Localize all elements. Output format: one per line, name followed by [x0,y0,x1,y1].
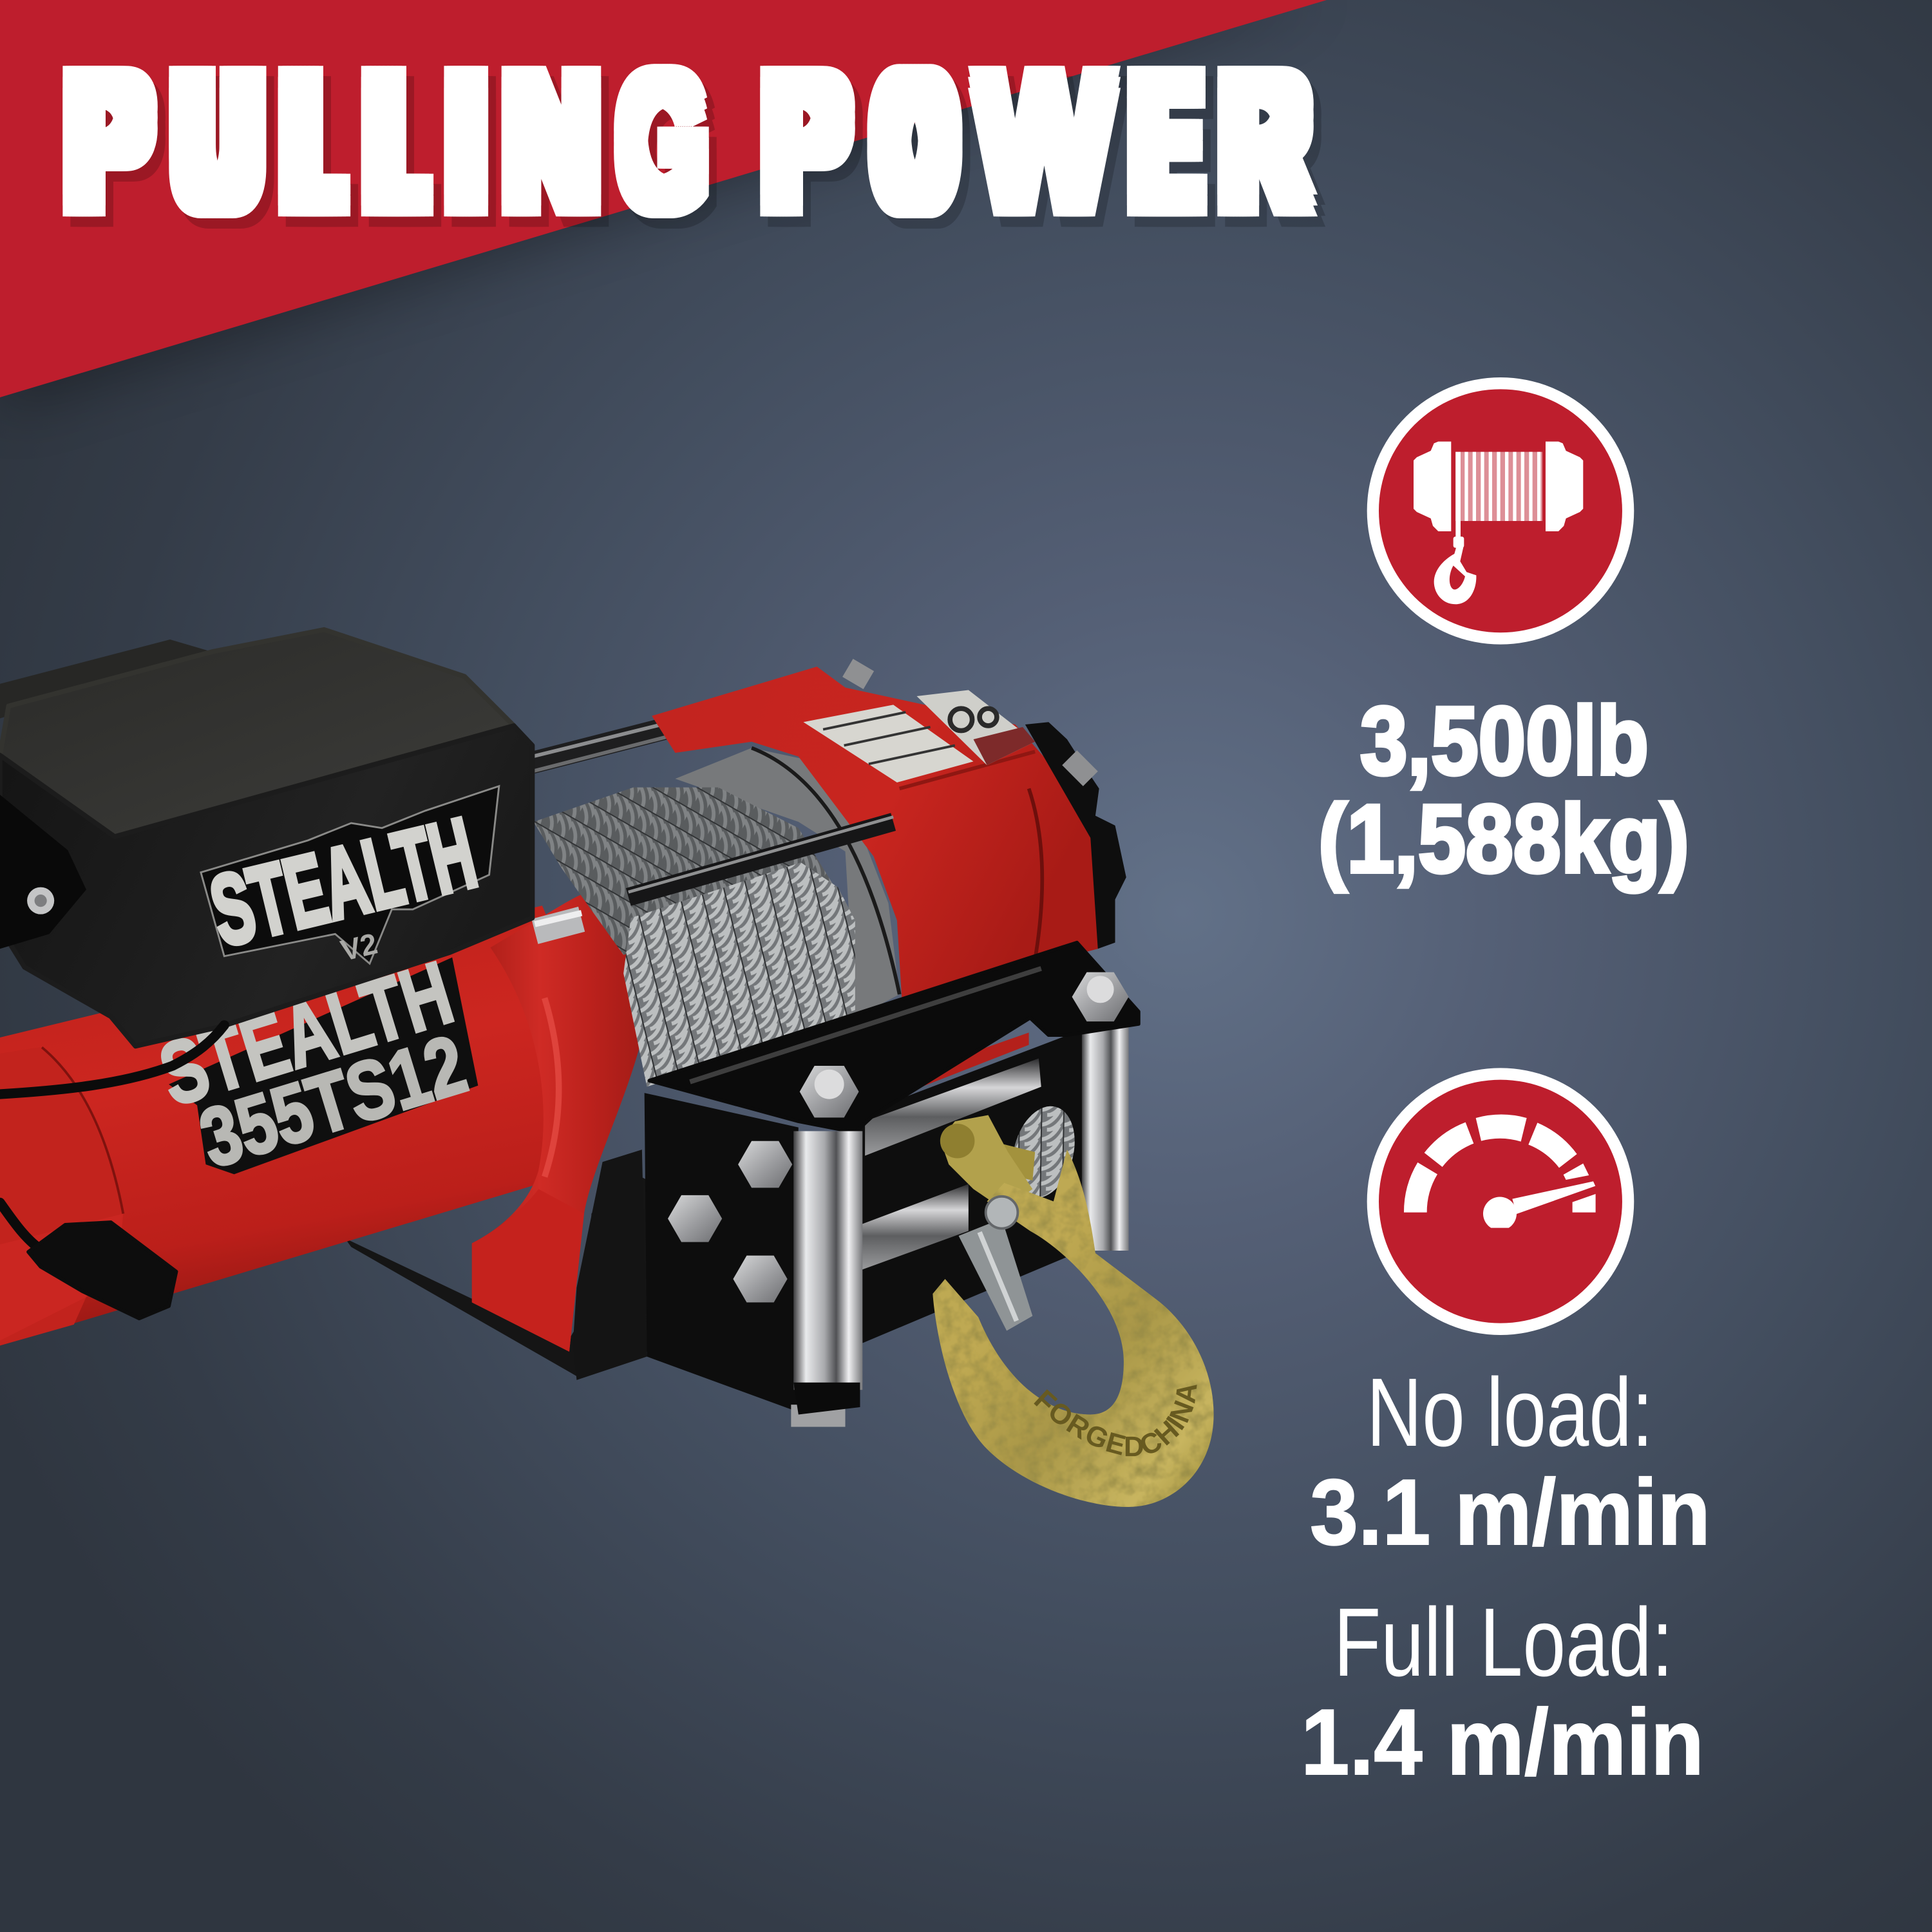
fairlead rollers [860,1059,1041,1271]
winch product image [0,627,1214,1507]
title [62,37,1325,245]
capacity text: 3,500lb [1360,687,1649,795]
motor cylinder [0,905,561,1345]
title: P [67,37,149,245]
fairlead top plate [649,943,1139,1132]
drum windings [1455,452,1542,521]
title: G [618,37,708,245]
model badge plate: 355TS12 [190,1018,476,1186]
hook shackle [940,1115,1035,1210]
line speed text: 1.4 m/min [1301,1690,1704,1794]
rear chrome post [1082,1023,1129,1251]
black end knob [1025,722,1126,949]
shadow under red banner [0,0,1325,412]
model badge plate [149,942,478,1186]
rubber cable boot [28,1222,176,1318]
motor end cap band [0,1047,123,1345]
side bracket and bolt [0,795,86,949]
fairlead front plate [645,1093,860,1412]
red end flange and foot [472,888,642,1352]
title: L [290,37,335,245]
drum end flanges [1414,442,1583,531]
mounting bolts [668,1141,792,1302]
icon: speedometer [1367,1068,1634,1335]
title: E [1135,37,1197,245]
wire rope rear coil [533,788,855,955]
red corner banner [0,0,1327,397]
wire rope front coil [623,862,855,1087]
gauge needle [1483,1181,1595,1228]
lower plate foot [793,1383,860,1414]
line speed text: Full Load: [1334,1587,1673,1696]
line speed text [1301,1358,1710,1794]
title: R [1222,37,1307,245]
far rod [533,722,672,772]
fairlead side bracket [573,1150,647,1380]
control box front [0,726,533,1046]
line speed text: No load: [1367,1358,1653,1466]
model badge plate: STEALTH [149,942,463,1124]
line speed text: 3.1 m/min [1310,1460,1710,1564]
hook [1434,546,1476,604]
cable [1454,452,1464,548]
black control box rear strip [0,639,212,718]
gold hook [933,1150,1214,1507]
control box lid [0,630,514,837]
red gearbox housing [652,667,1098,1001]
capacity text: (1,588kg) [1318,784,1689,893]
red glimpse behind fairlead [881,1032,1029,1103]
STEALTH V2 emblem: V2 [337,926,381,967]
title: I [447,37,486,245]
title: O [878,37,952,245]
lower post bolt [791,1405,846,1427]
grey drum flange [675,748,900,1018]
capacity text [1318,687,1689,893]
top nuts [800,972,1129,1117]
snap latch [959,1218,1032,1331]
title: U [178,37,258,245]
rod bolts [535,668,1090,931]
title: L [374,37,418,245]
warning sticker [803,705,974,782]
hook pin disc [986,1197,1018,1229]
title: W [976,37,1112,245]
title: P [764,37,846,245]
rope eye [1003,1099,1084,1205]
icon: winch drum and hook [1367,377,1634,645]
title: N [504,37,598,245]
front chrome post [793,1131,862,1390]
gauge segments [1404,1115,1596,1213]
STEALTH V2 emblem: STEALTH [201,798,486,967]
power cables [0,1025,224,1249]
fairlead rear dark interior [858,1029,1097,1343]
mounting plate [345,1171,653,1378]
hook forged marking: FORGEDCHINA [1034,1385,1197,1457]
engage sticker [916,690,1035,765]
near rod [629,817,893,897]
